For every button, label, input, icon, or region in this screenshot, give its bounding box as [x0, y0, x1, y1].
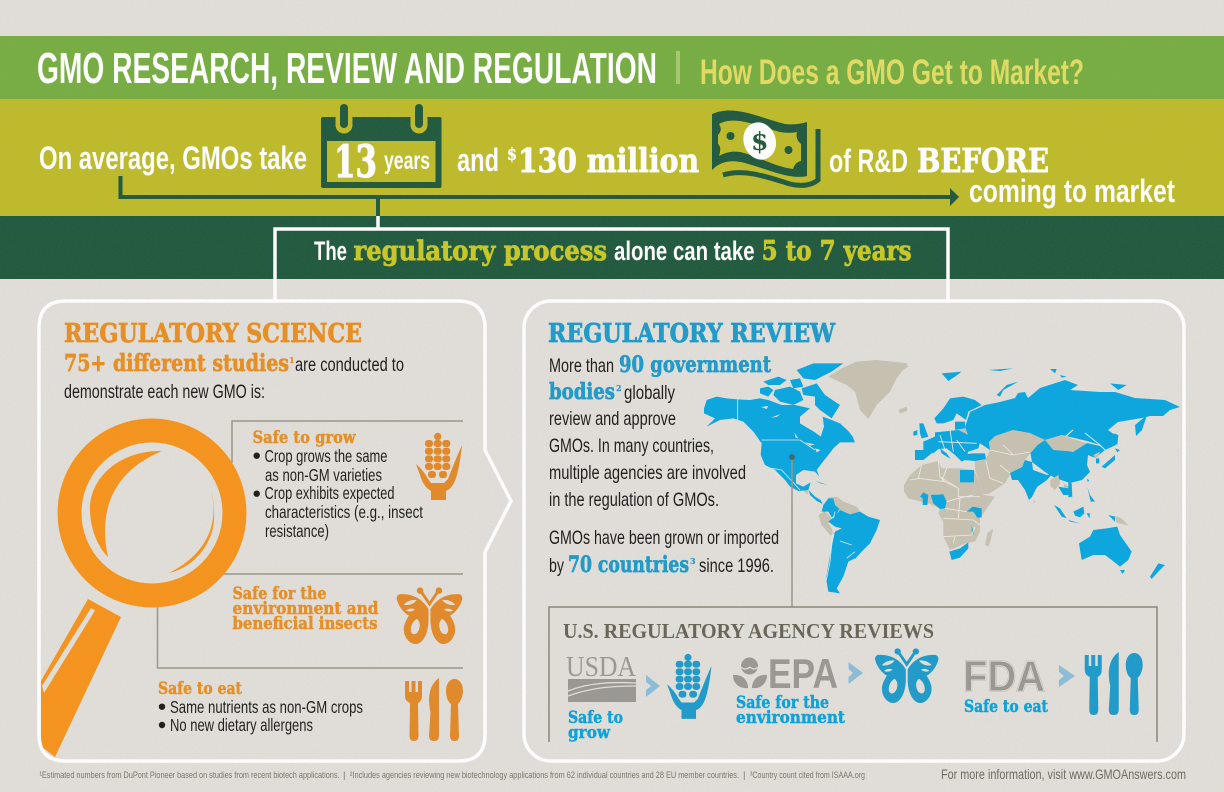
logo: FDA: FDA [963, 652, 1045, 701]
text: regulatory process duration: regulatory process [354, 236, 607, 267]
logo: USDA [566, 652, 637, 702]
logo: USDA: USDA [566, 652, 637, 683]
text: government bodies: More than [549, 355, 614, 377]
footnotes: ²Includes agencies reviewing new biotechnology applications from 62 individual countries and 28 EU member countries. [350, 770, 739, 781]
text: government bodies: in the regulation of GMOs. [549, 489, 719, 511]
footnotes: ³Country count cited from ISAAA.org [750, 770, 865, 781]
arrow [646, 675, 660, 697]
white connector box [275, 216, 948, 301]
text: safe for the environment: environment [736, 708, 845, 728]
text: regulatory process duration: The [314, 236, 347, 266]
section: safe for the environment: beneficial insects [232, 614, 378, 634]
section: safe for the environment: environment and [232, 599, 379, 619]
text: 70 countries: 3 [690, 556, 696, 566]
timeline arrow [120, 176, 959, 216]
arrow [848, 662, 863, 684]
text: regulatory process duration [314, 236, 912, 267]
text: of R&D BEFORE [829, 141, 1049, 180]
text: and $130 million: $ [507, 145, 517, 165]
section: safe to eat: No new dietary allergens [170, 715, 313, 735]
icon: calendar with 13 years: 13 [334, 137, 377, 188]
icon: dollar bill: $ [751, 127, 768, 156]
text: government bodies: GMOs. In many countries, [549, 435, 714, 457]
section: safe to grow: as non-GM varieties [265, 465, 382, 485]
icon: butterfly blue [875, 648, 938, 703]
world map [704, 360, 1180, 593]
main title: GMO RESEARCH, REVIEW AND REGULATION [37, 44, 657, 93]
icon: dollar bill [712, 110, 818, 185]
text: safe for the environment: Safe for the [736, 693, 829, 713]
icon: calendar with 13 years: years [384, 147, 430, 175]
text: 70 countries: GMOs have been grown or imported [549, 527, 779, 549]
section: safe for the environment: Safe for the [232, 584, 327, 604]
section: safe to grow [252, 428, 423, 541]
icon: cutlery blue [1085, 652, 1143, 715]
text: regulatory process duration: alone can take [614, 236, 755, 266]
panel: regulatory science [30, 301, 511, 761]
text: of R&D BEFORE: of R&D [829, 143, 908, 179]
intro text [64, 350, 404, 403]
footnotes: | [343, 770, 345, 781]
logo: FDA: FDA [963, 652, 1045, 701]
text: and $130 million: and [457, 142, 499, 178]
section: safe to grow: Crop grows the same [264, 446, 388, 466]
text: of R&D BEFORE: BEFORE [917, 141, 1049, 180]
text: government bodies: multiple agencies are involved [549, 462, 746, 484]
intro text: 1 [289, 355, 295, 365]
title divider [676, 51, 680, 84]
text: regulatory process duration: 5 to 7 years [762, 236, 912, 267]
section: safe to grow: Safe to grow [252, 428, 356, 448]
logo: EPA: EPA [768, 650, 838, 697]
text: government bodies: globally [624, 382, 675, 404]
intro text: 75+ different studies [64, 350, 289, 377]
map pointer line [789, 454, 795, 607]
panel: US agency reviews [549, 607, 1157, 743]
text: safe for the environment [736, 693, 845, 728]
logo: EPA [733, 650, 838, 697]
icon: calendar with 13 years [321, 108, 442, 188]
text: 70 countries: 70 countries [568, 552, 689, 578]
text: 70 countries: since 1996. [699, 555, 774, 577]
icon: magnifying glass [30, 430, 234, 757]
arrow [1059, 665, 1075, 687]
icon: corn [416, 433, 462, 500]
section: safe to eat: Safe to eat [158, 679, 242, 699]
section: safe to grow: characteristics (e.g., insect [265, 502, 423, 522]
section: safe to grow: resistance) [265, 521, 329, 541]
text: government bodies: bodies [549, 379, 615, 405]
text: on average: On average, GMOs take [39, 140, 307, 176]
text: 70 countries [549, 527, 779, 578]
divider lines [158, 421, 463, 668]
text: government bodies [549, 352, 772, 511]
text: and $130 million: 130 million [518, 141, 699, 180]
heading: regulatory science: REGULATORY SCIENCE [64, 319, 362, 349]
text: government bodies: 2 [616, 383, 622, 393]
text: safe to grow: grow [568, 723, 610, 743]
title banner [0, 36, 1224, 99]
icon: corn blue [667, 654, 712, 719]
text: 70 countries: by [549, 555, 564, 577]
footnotes: | [743, 770, 745, 781]
intro text: are conducted to [295, 354, 404, 376]
band: time and cost [0, 99, 1224, 216]
footnotes: ¹Estimated numbers from DuPont Pioneer based on studies from recent biotech applications. [40, 770, 340, 781]
text: government bodies: 90 government [619, 352, 772, 378]
heading: agency reviews: U.S. REGULATORY AGENCY REVIEWS [563, 619, 934, 643]
icon: cutlery [405, 678, 463, 741]
footnotes [40, 770, 865, 781]
section: safe to eat [158, 679, 363, 735]
section: safe to eat: Same nutrients as non-GM crops [170, 697, 363, 717]
panel: regulatory review [524, 301, 1184, 761]
text: and $130 million [457, 141, 699, 180]
text: safe to eat: Safe to eat [964, 697, 1048, 717]
text: safe to grow: Safe to [568, 708, 623, 728]
band: regulatory process [0, 216, 1224, 279]
intro text: demonstrate each new GMO is: [64, 381, 265, 403]
icon: butterfly [397, 587, 462, 644]
section: safe to grow: Crop exhibits expected [264, 483, 394, 503]
heading: regulatory review: REGULATORY REVIEW [548, 319, 836, 349]
section: safe for the environment [232, 584, 379, 634]
text: government bodies: review and approve [549, 408, 676, 430]
text: safe to grow [568, 708, 623, 743]
